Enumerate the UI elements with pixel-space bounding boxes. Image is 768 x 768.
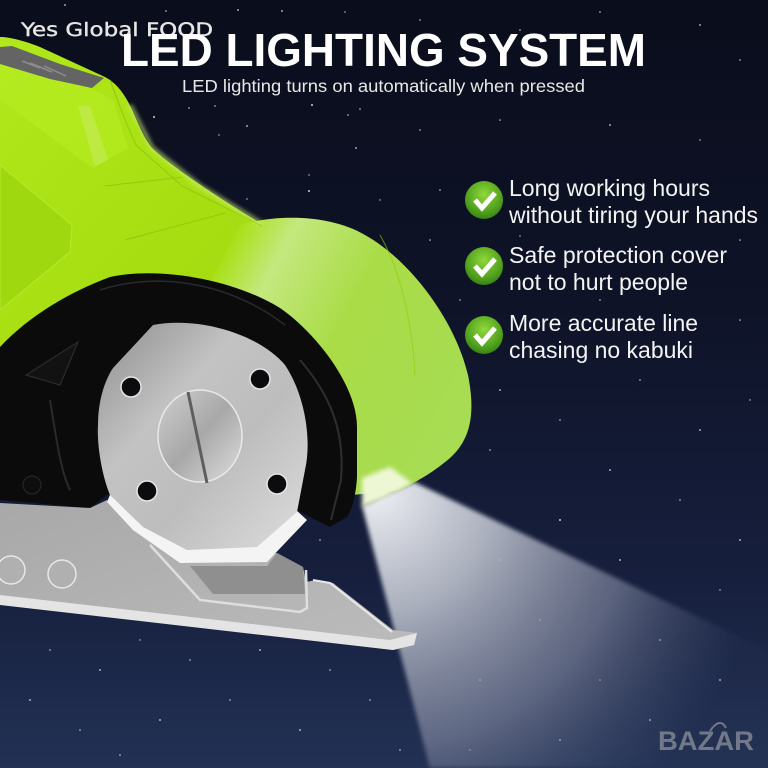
tool <box>0 37 471 650</box>
blade holes <box>121 369 287 501</box>
title: LED LIGHTING SYSTEM <box>121 24 646 76</box>
icon: green check <box>465 316 503 354</box>
switch button <box>0 46 104 88</box>
light beam <box>362 482 768 768</box>
plate rivets <box>0 556 76 588</box>
top edge glow <box>130 105 262 224</box>
rounded head <box>200 218 471 495</box>
benefit text: chasing no kabuki <box>509 337 693 363</box>
icon: green check <box>465 247 503 285</box>
center bolt <box>158 390 242 482</box>
benefit text: Long working hours <box>509 175 710 201</box>
benefit text <box>509 310 698 363</box>
blade guard step <box>190 553 305 594</box>
benefit text: More accurate line <box>509 310 698 336</box>
benefit text <box>509 242 727 295</box>
benefit text: without tiring your hands <box>508 202 758 228</box>
body panel lines <box>105 80 415 375</box>
guard arrow mark <box>26 342 78 385</box>
blade white rim <box>107 490 307 563</box>
plate bottom edge <box>0 595 417 650</box>
logo: Bazar watermark: BAZAR <box>658 726 754 756</box>
benefit text: not to hurt people <box>509 269 688 295</box>
LED glow <box>362 467 412 507</box>
subtitle: LED lighting turns on automatically when pressed <box>182 76 585 96</box>
body upper highlight <box>0 63 128 168</box>
benefit text <box>508 175 758 228</box>
circular blade <box>98 323 308 563</box>
steel base plate <box>0 500 417 650</box>
blade disc <box>98 323 308 550</box>
body shaded panel <box>0 165 72 310</box>
green body <box>0 37 300 360</box>
benefit text: Safe protection cover <box>509 242 727 268</box>
icon: green check <box>465 181 503 219</box>
benefit 2 <box>465 242 727 295</box>
watermark: Yes Global FOOD: Yes Global FOOD <box>20 19 213 41</box>
benefit 1 <box>465 175 758 228</box>
benefit 3 <box>465 310 698 363</box>
black guard <box>0 273 357 527</box>
